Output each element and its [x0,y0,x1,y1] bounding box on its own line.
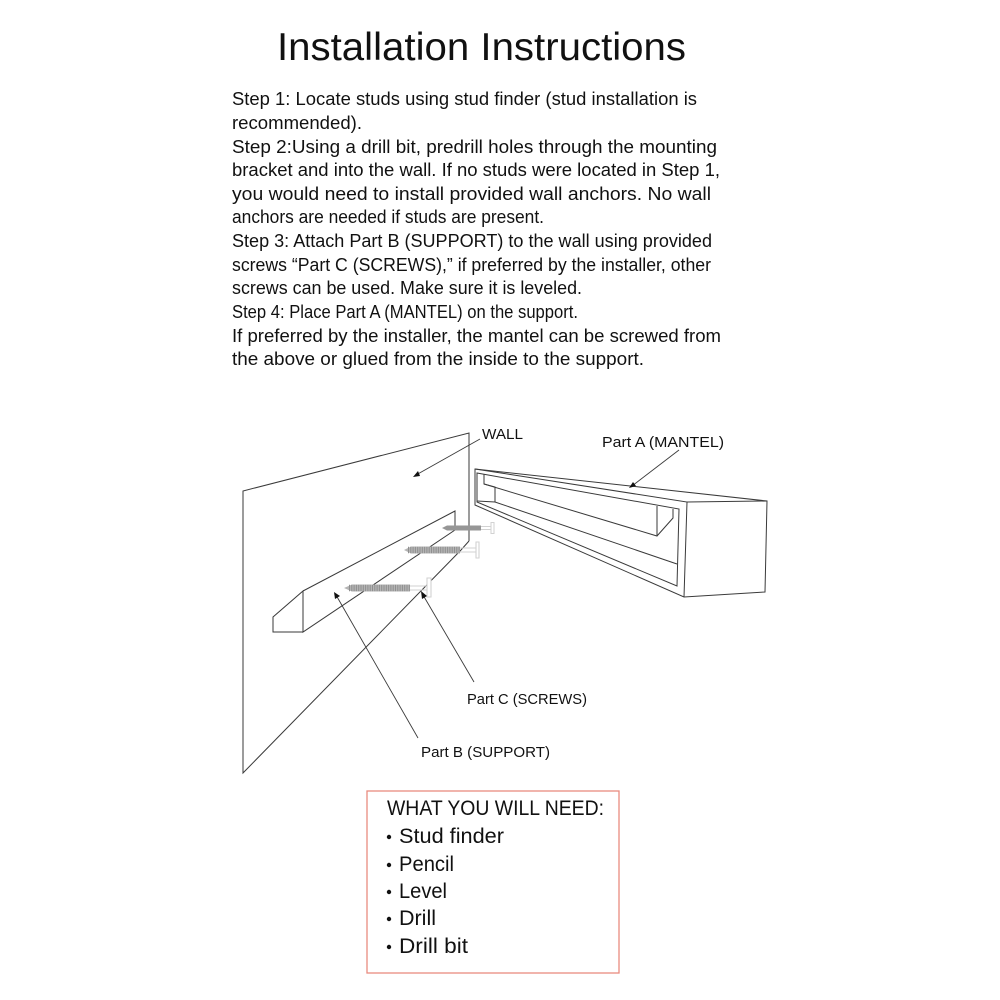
diagram: wall outline [243,433,469,773]
label: Part B: Part B (SUPPORT) [421,744,550,761]
arrow: support label [334,592,418,738]
text block: installation steps: recommended). [232,113,362,133]
panel: what you will need [367,791,619,973]
list: tools: Pencil [399,853,454,876]
title: Installation Instructions [277,26,686,69]
text block: installation steps: bracket and into the wall. If no studs were located in Step 1, [232,160,720,180]
text block: installation steps: Step 4: Place Part A (MANTEL) on the support. [232,302,578,322]
text block: installation steps: Step 3: Attach Part B (SUPPORT) to the wall using provided [232,231,712,251]
text block: installation steps: Step 1: Locate studs using stud finder (stud installation is [232,89,697,109]
text block: installation steps: screws can be used. Make sure it is leveled. [232,278,582,298]
list: tools: Drill [399,907,436,930]
arrow: screws label [421,591,474,682]
label: wall: WALL [482,426,523,443]
list: tools: Drill bit [399,935,468,958]
text block: installation steps [232,89,721,369]
diagram: Part A mantel [475,469,767,597]
diagram: Part C screws [344,522,494,597]
label: Part C: Part C (SCREWS) [467,691,587,708]
text block: installation steps: anchors are needed if studs are present. [232,207,544,227]
list: tools [387,825,504,958]
text block: installation steps: screws “Part C (SCREWS),” if preferred by the installer, other [232,255,711,275]
text block: installation steps: you would need to install provided wall anchors. No wall [232,184,711,204]
text block: installation steps: the above or glued from the inside to the support. [232,349,644,369]
arrow: wall label [413,439,480,477]
list: tools: Level [399,880,447,903]
heading: what you will need: WHAT YOU WILL NEED: [387,797,604,820]
text block: installation steps: If preferred by the installer, the mantel can be screwed from [232,326,721,346]
text block: installation steps: Step 2:Using a drill bit, predrill holes through the mounting [232,137,717,157]
diagram: Part B support [273,511,455,632]
list: tools: Stud finder [399,825,504,848]
arrow: mantel label [629,450,679,488]
label: Part A: Part A (MANTEL) [602,434,724,451]
